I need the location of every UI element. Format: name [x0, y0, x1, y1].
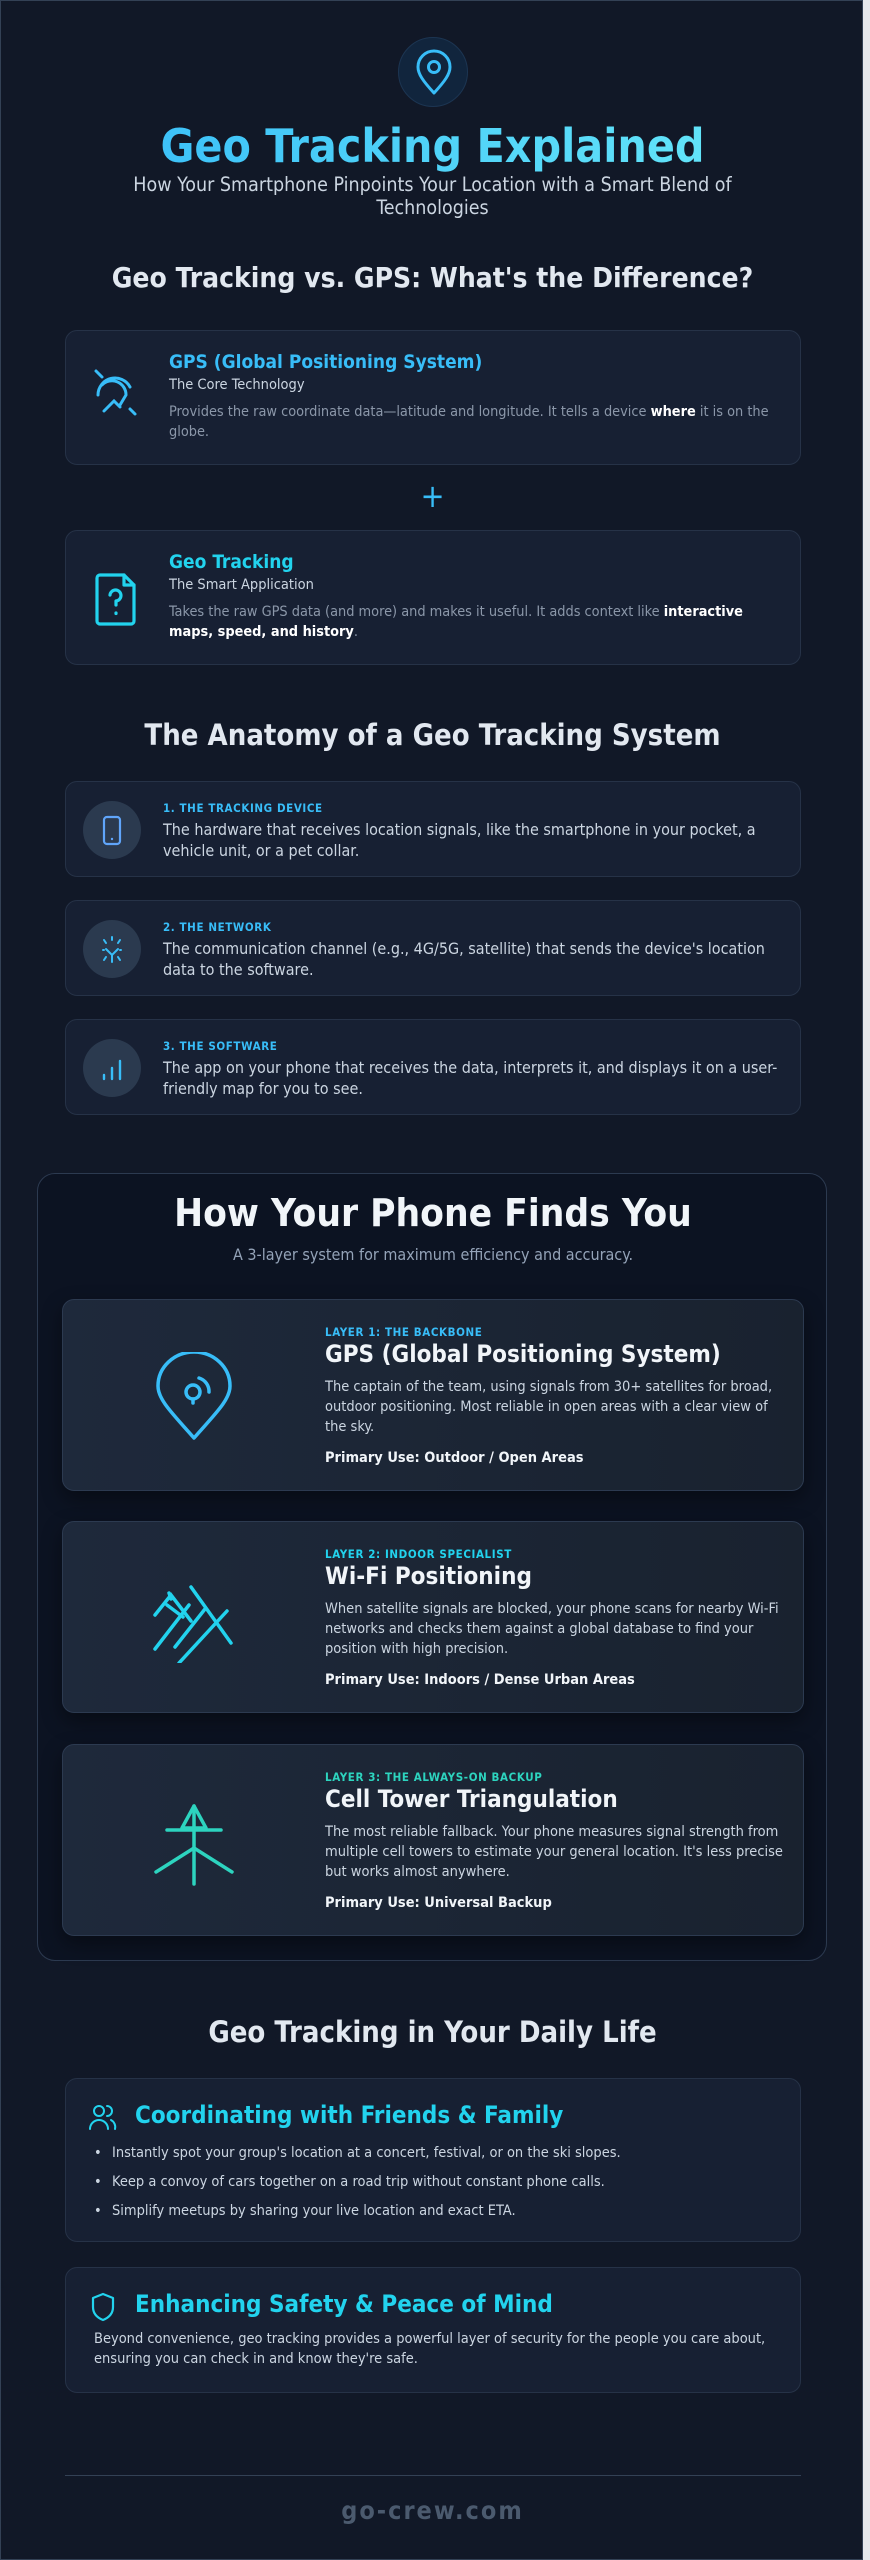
panel: layer 3 cell tower: Primary Use: Universal Backup	[325, 1895, 552, 1911]
panel: layer 2 wifi: Primary Use: Indoors / Dense Urban Areas	[325, 1672, 635, 1688]
panel: layer 3 cell tower: LAYER 3: THE ALWAYS-ON BACKUP	[325, 1770, 542, 1784]
icon: file question	[95, 573, 136, 626]
panel: layer 2 wifi: When satellite signals are blocked, your phone scans for nearby Wi-Fi networks and checks them against a global database to find your position with high precision.	[325, 1601, 779, 1657]
bullet list: •	[94, 2174, 102, 2190]
panel: friends & family: Coordinating with Friends & Family	[135, 2101, 563, 2129]
heading: geo tracking vs gps: Geo Tracking vs. GPS: What's the Difference?	[112, 261, 753, 294]
panel: layer 3 cell tower: Cell Tower Triangulation	[325, 1785, 618, 1813]
bullet list: •	[94, 2145, 102, 2161]
panel: geo tracking card: Takes the raw GPS data (and more) and makes it useful. It adds context like interactive maps, speed, and history.	[169, 604, 743, 640]
icon: header location pin	[398, 37, 468, 107]
panel: layer 2 wifi: LAYER 2: INDOOR SPECIALIST	[325, 1547, 512, 1561]
panel: software: The app on your phone that receives the data, interprets it, and displays it on a user-friendly map for you to see.	[163, 1058, 777, 1098]
panel: tracking device: The hardware that receives location signals, like the smartphone in your pocket, a vehicle unit, or a pet collar.	[163, 820, 756, 860]
panel: safety: Beyond convenience, geo tracking provides a powerful layer of security for the people you care about, ensuring you can check in and know they're safe.	[94, 2331, 765, 2367]
bullet list: Simplify meetups by sharing your live location and exact ETA.	[112, 2203, 516, 2219]
subtitle: A 3-layer system for maximum efficiency and accuracy.	[233, 1245, 633, 1264]
panel: safety	[65, 2267, 801, 2393]
heading: How Your Phone Finds You	[174, 1191, 692, 1236]
panel: GPS card: Provides the raw coordinate data—latitude and longitude. It tells a device where it is on the globe.	[169, 404, 769, 440]
panel: layer 2 wifi: Wi-Fi Positioning	[325, 1562, 532, 1590]
panel: layer 2 wifi	[62, 1521, 804, 1713]
panel: layer 1 GPS: The captain of the team, using signals from 30+ satellites for broad, outdoor positioning. Most reliable in open areas with a clear view of the sky.	[325, 1379, 772, 1435]
panel: network: 2. THE NETWORK	[163, 920, 272, 934]
bullet list: Keep a convoy of cars together on a road trip without constant phone calls.	[112, 2174, 605, 2190]
panel: software: 3. THE SOFTWARE	[163, 1039, 277, 1053]
panel: network: The communication channel (e.g., 4G/5G, satellite) that sends the device's location data to the software.	[163, 939, 765, 979]
panel: GPS card: GPS (Global Positioning System)	[169, 351, 482, 373]
footer: go-crew.com	[341, 2496, 524, 2525]
panel: layer 1 GPS: Primary Use: Outdoor / Open Areas	[325, 1450, 584, 1466]
icon: plus: +	[420, 477, 445, 515]
panel: GPS card	[65, 330, 801, 465]
title	[81, 115, 784, 177]
panel: layer 1 GPS: GPS (Global Positioning System)	[325, 1340, 721, 1368]
heading: anatomy: The Anatomy of a Geo Tracking System	[144, 718, 721, 752]
panel: layer 3 cell tower	[62, 1744, 804, 1936]
bullet list	[94, 2145, 621, 2219]
icon: tower	[154, 1804, 234, 1886]
title: Geo Tracking Explained	[160, 119, 705, 173]
panel: network	[65, 900, 801, 996]
panel: layer 1 GPS	[62, 1299, 804, 1491]
bullet list: Instantly spot your group's location at a concert, festival, or on the ski slopes.	[112, 2145, 621, 2161]
panel: layer 1 GPS: LAYER 1: THE BACKBONE	[325, 1325, 482, 1339]
panel: geo tracking card	[65, 530, 801, 665]
panel: how your phone finds you	[37, 1173, 827, 1961]
panel: layer 3 cell tower: The most reliable fallback. Your phone measures signal strength from multiple cell towers to estimate your general location. It's less precise but works almost anywhere.	[325, 1824, 783, 1880]
panel: geo tracking card: The Smart Application	[169, 577, 314, 593]
icon: phone	[83, 801, 141, 859]
icon: shield	[92, 2292, 114, 2322]
icon: users	[89, 2105, 116, 2130]
panel: geo tracking card: Geo Tracking	[169, 551, 294, 573]
icon: gps pin	[156, 1352, 232, 1440]
icon: gps off	[94, 369, 137, 416]
subtitle: How Your Smartphone Pinpoints Your Location with a Smart Blend of Technologies	[133, 173, 732, 219]
panel: software	[65, 1019, 801, 1115]
panel: tracking device	[65, 781, 801, 877]
panel: GPS card: The Core Technology	[169, 377, 305, 393]
icon: network	[83, 920, 141, 978]
panel: friends & family	[65, 2078, 801, 2242]
icon: wifi	[153, 1585, 233, 1663]
heading: daily life: Geo Tracking in Your Daily Life	[208, 2015, 657, 2049]
panel: tracking device: 1. THE TRACKING DEVICE	[163, 801, 323, 815]
bullet list: •	[94, 2203, 102, 2219]
panel: safety: Enhancing Safety & Peace of Mind	[135, 2290, 553, 2318]
icon: bars	[83, 1039, 141, 1097]
